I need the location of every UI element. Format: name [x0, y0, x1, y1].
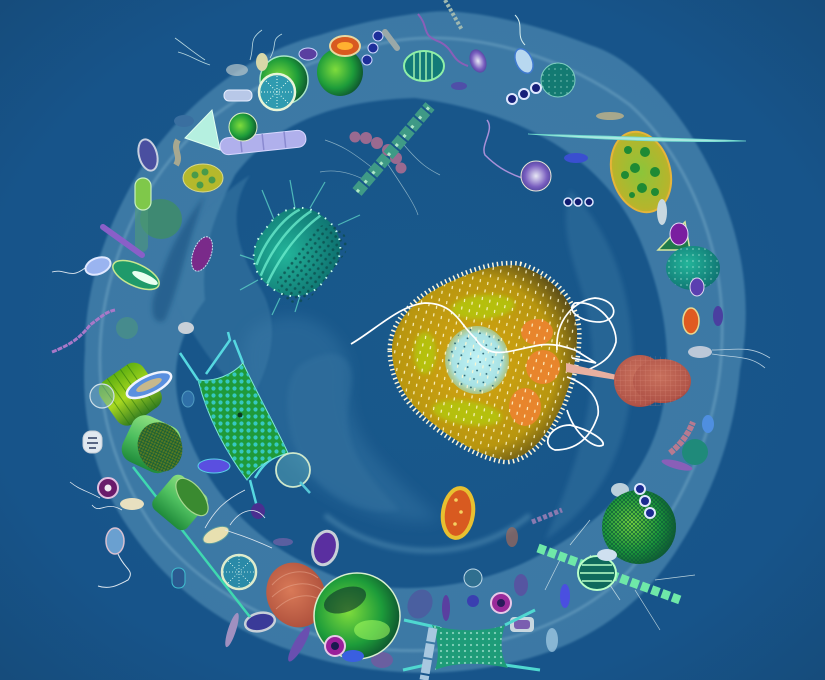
green filament chain with setae	[320, 106, 440, 215]
yellow-green oval cell	[602, 125, 680, 219]
small blue oval and bead trio	[564, 153, 593, 206]
right cluster	[657, 199, 770, 368]
upper-left cells	[135, 110, 307, 192]
bottom cluster small cells	[371, 569, 558, 668]
long diagonal filament with barrel	[133, 467, 250, 617]
lower-right cluster	[602, 415, 714, 564]
striped oval green cell	[404, 51, 444, 81]
spines	[392, 265, 577, 460]
green rectangular diatom	[180, 332, 310, 507]
lower-right filament and striped cell	[538, 520, 695, 630]
barrel two	[117, 411, 185, 478]
top squiggles and small cells	[418, 0, 624, 120]
lower-left cell cluster	[172, 391, 341, 648]
cell body	[392, 265, 577, 460]
nucleus	[445, 326, 509, 394]
orange organelles	[509, 319, 560, 426]
purple bead chain	[350, 132, 406, 174]
red-brown ball with stalk	[566, 355, 691, 407]
needle diatom	[528, 134, 746, 142]
nucleus pits	[447, 328, 507, 392]
top-left cluster	[175, 30, 308, 110]
large green sphere with red-brown cell	[256, 553, 400, 664]
small inner cells	[506, 510, 570, 608]
central spiny dinoflagellate	[351, 265, 616, 460]
left barrel diatoms	[70, 358, 189, 587]
yellow capsule	[440, 486, 476, 540]
flagella	[351, 298, 616, 450]
green barrel diatom top	[299, 31, 397, 96]
teal spiny diatom	[239, 180, 360, 315]
barrel one	[94, 358, 167, 430]
surface spicules	[392, 265, 577, 460]
bottom rectangular diatom	[403, 610, 540, 680]
green patches	[414, 292, 516, 430]
left cells	[52, 178, 217, 352]
purple flagellate	[484, 120, 551, 191]
translucent water ring	[84, 11, 746, 673]
